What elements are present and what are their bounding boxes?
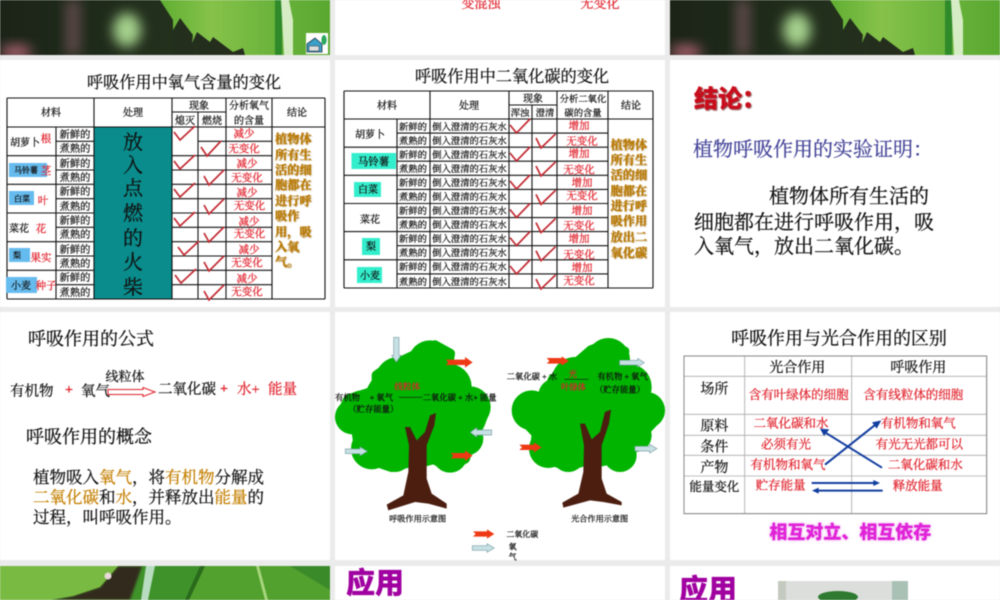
- concept definition: 植物吸入氧气，将有机物分解成: [33, 468, 264, 487]
- carbon dioxide results: 无变化: [566, 189, 598, 202]
- comparison table: 能量变化: [689, 479, 740, 494]
- fresh and cooked labels: 新鲜的: [60, 214, 90, 227]
- oxygen results: 无变化: [228, 142, 260, 155]
- carbon dioxide results: 增加: [568, 119, 590, 132]
- material labels: 白菜: [358, 183, 378, 196]
- fresh and cooked labels with treatment: 倒入澄清的石灰水: [432, 261, 507, 273]
- carbon dioxide results: 增加: [568, 232, 590, 245]
- panel: respiration versus photosynthesis slide: [670, 312, 1000, 560]
- material labels: 菜花: [9, 222, 29, 235]
- oxygen results: 无变化: [234, 199, 266, 212]
- cell text: 释放能量: [893, 478, 943, 493]
- conclusion text: 胞都在: [275, 177, 312, 192]
- icon: home button: [306, 33, 328, 54]
- fresh and cooked labels with treatment: 新鲜的: [399, 205, 427, 217]
- respiration equation: + 氧气: [370, 392, 394, 402]
- fresh and cooked labels: 煮熟的: [60, 257, 90, 270]
- comparison table: 条件: [700, 439, 728, 455]
- fresh and cooked labels with treatment: 倒入澄清的石灰水: [432, 121, 507, 133]
- fresh and cooked labels with treatment: 倒入澄清的石灰水: [432, 205, 507, 217]
- concept definition: 过程，叫呼吸作用。: [33, 508, 182, 527]
- table: oxygen experiment: [6, 98, 325, 300]
- fresh and cooked labels: 煮熟的: [60, 142, 90, 155]
- panel: bottom-right application slide: [670, 566, 1000, 600]
- fresh and cooked labels with treatment: 倒入澄清的石灰水: [432, 177, 507, 189]
- heading: 呼吸作用与光合作用的区别: [731, 328, 947, 348]
- oxygen results: 无变化: [231, 171, 263, 184]
- conclusion text: 放出二: [610, 229, 647, 244]
- panel: bottom-left leaf photo: [0, 566, 330, 600]
- oxygen results: 无变化: [234, 227, 266, 240]
- material labels: 梨: [366, 240, 376, 253]
- subheading: 植物呼吸作用的实验证明：: [693, 138, 933, 161]
- carbon dioxide results: 无变化: [563, 248, 595, 261]
- concept definition: [33, 468, 264, 527]
- oxygen results: 无变化: [231, 285, 263, 298]
- material labels: 马铃薯: [358, 155, 390, 168]
- photosynthesis equation: 光: [569, 369, 578, 379]
- table: carbon dioxide experiment: [344, 91, 653, 289]
- formula: 水+: [237, 381, 260, 398]
- conclusion text: 活的细: [275, 162, 312, 177]
- comparison table: 原料: [700, 418, 728, 434]
- fresh and cooked labels: 新鲜的: [60, 185, 90, 198]
- table: oxygen experiment: 分析氧气: [229, 99, 269, 112]
- fresh and cooked labels with treatment: 倒入澄清的石灰水: [432, 149, 507, 161]
- oxygen results: [228, 127, 266, 298]
- conclusion text: 氧化碳: [610, 245, 647, 260]
- arrows: oxygen: [345, 337, 657, 456]
- conclusion text: 进行呼: [610, 198, 647, 213]
- table: oxygen experiment: 材料: [41, 106, 61, 119]
- captions: [389, 513, 628, 523]
- fresh and cooked labels: 煮熟的: [60, 286, 90, 299]
- material labels: 花: [36, 222, 47, 235]
- material labels: 菜花: [360, 213, 380, 226]
- formula: 有机物: [10, 382, 54, 400]
- table: carbon dioxide experiment: 澄清: [536, 107, 554, 119]
- cell text: 有机物和氧气: [751, 457, 826, 472]
- photosynthesis equation: （贮存能量）: [595, 384, 645, 394]
- cell text: 贮存能量: [756, 477, 806, 492]
- fresh and cooked labels with treatment: 新鲜的: [399, 233, 427, 245]
- treatment column text: 柴: [123, 276, 143, 299]
- panel: respiration formula and concept slide: [0, 312, 330, 560]
- legend: [472, 529, 538, 561]
- table: carbon dioxide experiment: 材料: [377, 99, 397, 112]
- cell text: [749, 387, 964, 493]
- illustration: respiration tree: [335, 340, 491, 510]
- panel: top-left leaf photo: [0, 0, 330, 59]
- body text: [694, 185, 934, 258]
- fresh and cooked labels: 煮熟的: [60, 228, 90, 241]
- respiration equation: [335, 381, 497, 414]
- material labels: 小麦: [11, 279, 31, 292]
- table: oxygen experiment: 熄灭: [175, 114, 195, 127]
- panel: tree diagrams slide: [335, 312, 665, 561]
- material labels: 果实: [30, 252, 52, 264]
- formula: +: [220, 382, 228, 397]
- cell text: 含有线粒体的细胞: [863, 387, 964, 402]
- check marks: [174, 126, 224, 300]
- respiration equation: 有机物: [335, 392, 361, 402]
- material labels: 胡萝卜: [355, 128, 385, 141]
- table: carbon dioxide experiment: 分析二氧化: [560, 93, 606, 105]
- carbon dioxide results: [563, 119, 598, 287]
- formula: [10, 369, 297, 400]
- illustration: photosynthesis tree: [512, 338, 665, 508]
- conclusion text: 入氧: [275, 239, 300, 254]
- fresh and cooked labels with treatment: 倒入澄清的石灰水: [432, 276, 507, 288]
- arrow: reaction: [108, 388, 155, 396]
- panel: conclusion slide: [670, 60, 1000, 307]
- oxygen results: 减少: [236, 186, 258, 199]
- body text: 入氧气，放出二氧化碳。: [694, 235, 914, 258]
- carbon dioxide results: 无变化: [566, 134, 598, 148]
- conclusion text: [610, 137, 647, 260]
- photosynthesis equation: 二氧化碳 + 水: [507, 372, 558, 382]
- carbon dioxide results: 增加: [572, 261, 592, 274]
- material labels: 叶: [38, 194, 49, 207]
- oxygen results: 减少: [238, 243, 260, 256]
- heading: 呼吸作用中氧气含量的变化: [87, 74, 281, 92]
- material labels: 根: [41, 132, 52, 145]
- captions: 光合作用示意图: [571, 513, 628, 523]
- comparison table: [684, 356, 987, 514]
- fresh and cooked labels with treatment: 新鲜的: [399, 261, 427, 273]
- table: oxygen experiment: 现象: [189, 99, 209, 112]
- fresh and cooked labels with treatment: 煮熟的: [399, 247, 427, 259]
- material labels: 小麦: [360, 269, 380, 282]
- cell text: 含有叶绿体的细胞: [749, 387, 849, 402]
- fresh and cooked labels with treatment: 煮熟的: [399, 135, 427, 147]
- carbon dioxide results: 无变化: [563, 163, 595, 176]
- material labels: [352, 128, 396, 283]
- legend: 氧: [509, 542, 517, 552]
- fresh and cooked labels with treatment: 新鲜的: [399, 177, 427, 189]
- callout: 相互对立、相互依存: [769, 521, 931, 542]
- heading: formula: 呼吸作用的公式: [28, 329, 154, 349]
- body text: 植物体所有生活的: [769, 185, 929, 208]
- fresh and cooked labels with treatment: 煮熟的: [399, 191, 427, 203]
- oxygen results: 无变化: [231, 256, 263, 269]
- comparison table: 光合作用: [769, 359, 825, 376]
- fresh and cooked labels: 新鲜的: [60, 243, 90, 256]
- panel: carbon dioxide change table slide: [335, 60, 665, 307]
- fresh and cooked labels with treatment: 倒入澄清的石灰水: [432, 247, 507, 259]
- captions: 呼吸作用示意图: [389, 513, 446, 523]
- oxygen results: 减少: [236, 157, 258, 170]
- legend: 二氧化碳: [506, 529, 538, 539]
- carbon dioxide results: 无变化: [563, 274, 595, 287]
- formula: 线粒体: [105, 369, 145, 384]
- fresh and cooked labels with treatment: 倒入澄清的石灰水: [432, 233, 507, 245]
- conclusion text: 用，吸: [275, 225, 312, 239]
- conclusion text: 胞都在: [610, 183, 647, 198]
- table: oxygen experiment: 结论: [287, 106, 307, 119]
- treatment column text: 燃: [123, 202, 144, 225]
- table: oxygen experiment: 燃烧: [202, 114, 222, 127]
- conclusion text: 进行呼: [275, 193, 312, 208]
- table: carbon dioxide experiment: 碳的含量: [564, 107, 602, 119]
- arrows: carbon dioxide: [446, 356, 569, 461]
- material labels: 白菜: [14, 194, 30, 204]
- formula: 氧气: [81, 383, 110, 400]
- fresh and cooked labels: 煮熟的: [60, 200, 90, 213]
- concept definition: 二氧化碳和水，并释放出能量的: [33, 488, 264, 507]
- fresh and cooked labels: 新鲜的: [60, 157, 90, 170]
- formula: +: [65, 383, 73, 398]
- cell text: 二氧化碳和水: [888, 457, 963, 472]
- panel: top-middle slide fragment: [335, 0, 665, 55]
- heading: conclusion: 结论：: [694, 86, 766, 113]
- respiration equation: 二氧化碳 + 水+ 能量: [423, 392, 497, 402]
- conclusion text: 吸作: [275, 208, 299, 223]
- treatment column text: [123, 131, 144, 299]
- conclusion text: 所有生: [275, 147, 312, 162]
- body text: 细胞都在进行呼吸作用，吸: [694, 211, 934, 234]
- material labels: 胡萝卜: [10, 136, 40, 149]
- material labels: [6, 132, 57, 293]
- cell text: 有光无光都可以: [876, 436, 964, 451]
- panel: oxygen change table slide: [0, 60, 330, 307]
- comparison table: 场所: [700, 380, 728, 397]
- fresh and cooked labels: 新鲜的: [60, 271, 90, 284]
- heading: application: 应用: [346, 566, 404, 600]
- carbon dioxide results: 增加: [572, 176, 592, 189]
- respiration equation: （贮存能量）: [348, 404, 398, 414]
- fresh and cooked labels with treatment: [399, 121, 507, 288]
- comparison table: 产物: [700, 459, 728, 476]
- fresh and cooked labels with treatment: 煮熟的: [399, 219, 427, 231]
- respiration equation: 线粒体: [394, 381, 421, 392]
- photosynthesis equation: 有机物 + 氧气: [597, 372, 649, 382]
- cell text: 二氧化碳和水: [754, 415, 829, 430]
- fresh and cooked labels with treatment: 倒入澄清的石灰水: [432, 163, 507, 175]
- treatment column text: 放: [123, 131, 143, 154]
- conclusion text: 气。: [275, 254, 299, 269]
- oxygen results: 减少: [238, 215, 260, 228]
- table: carbon dioxide experiment: 现象: [523, 92, 543, 105]
- treatment column text: 火: [123, 251, 143, 274]
- material labels: 茎: [41, 164, 53, 177]
- material labels: 马铃薯: [14, 165, 38, 175]
- panel: top-right leaf photo: [670, 0, 1000, 59]
- cell text: 必须有光: [761, 436, 811, 451]
- photo: plant in container: [778, 581, 908, 600]
- check marks: [510, 119, 556, 289]
- fresh and cooked labels with treatment: 倒入澄清的石灰水: [432, 219, 507, 231]
- comparison table: 呼吸作用: [890, 360, 946, 376]
- formula: 能量: [268, 381, 297, 398]
- fresh and cooked labels: 煮熟的: [60, 171, 90, 184]
- photosynthesis equation: 叶绿体: [561, 382, 587, 392]
- fresh and cooked labels with treatment: 新鲜的: [399, 149, 427, 161]
- fresh and cooked labels with treatment: 倒入澄清的石灰水: [432, 135, 507, 147]
- oxygen results: 减少: [236, 272, 258, 285]
- oxygen results: 减少: [234, 127, 255, 140]
- fresh and cooked labels with treatment: 倒入澄清的石灰水: [432, 191, 507, 203]
- fresh and cooked labels with treatment: 新鲜的: [399, 121, 427, 133]
- conclusion text: 植物体: [275, 131, 312, 146]
- conclusion text: 植物体: [610, 137, 647, 152]
- conclusion text: 吸作用: [610, 213, 647, 228]
- treatment column text: 点: [123, 177, 144, 200]
- arrows: crossing and energy: [812, 424, 883, 491]
- fresh and cooked labels: [60, 128, 90, 299]
- table: carbon dioxide experiment: 处理: [459, 99, 479, 112]
- conclusion text: 所有生: [610, 152, 647, 167]
- formula: 二氧化碳: [158, 381, 216, 398]
- panel: bottom-middle application slide: [335, 566, 665, 600]
- treatment column text: 入: [123, 154, 143, 177]
- photosynthesis equation: [507, 369, 649, 394]
- heading: concept: 呼吸作用的概念: [26, 426, 153, 447]
- legend: 气: [509, 551, 517, 561]
- material labels: 种子: [36, 279, 57, 292]
- table: oxygen experiment: 的含量: [234, 114, 264, 127]
- material labels: 梨: [13, 250, 21, 260]
- treatment column text: 的: [123, 227, 143, 250]
- fresh and cooked labels with treatment: 煮熟的: [399, 276, 427, 288]
- table: oxygen experiment: 处理: [123, 106, 143, 119]
- cell text: 有机物和氧气: [881, 415, 956, 430]
- table: carbon dioxide experiment: 浑浊: [511, 107, 530, 119]
- conclusion text: [275, 131, 312, 269]
- fresh and cooked labels: 新鲜的: [60, 128, 90, 141]
- carbon dioxide results: 增加: [572, 204, 592, 217]
- heading: 呼吸作用中二氧化碳的变化: [415, 68, 609, 86]
- fresh and cooked labels with treatment: 煮熟的: [399, 163, 427, 175]
- table: carbon dioxide experiment: 结论: [621, 99, 641, 112]
- conclusion text: 活的细: [610, 167, 647, 182]
- carbon dioxide results: 增加: [568, 147, 590, 160]
- carbon dioxide results: 无变化: [563, 219, 595, 232]
